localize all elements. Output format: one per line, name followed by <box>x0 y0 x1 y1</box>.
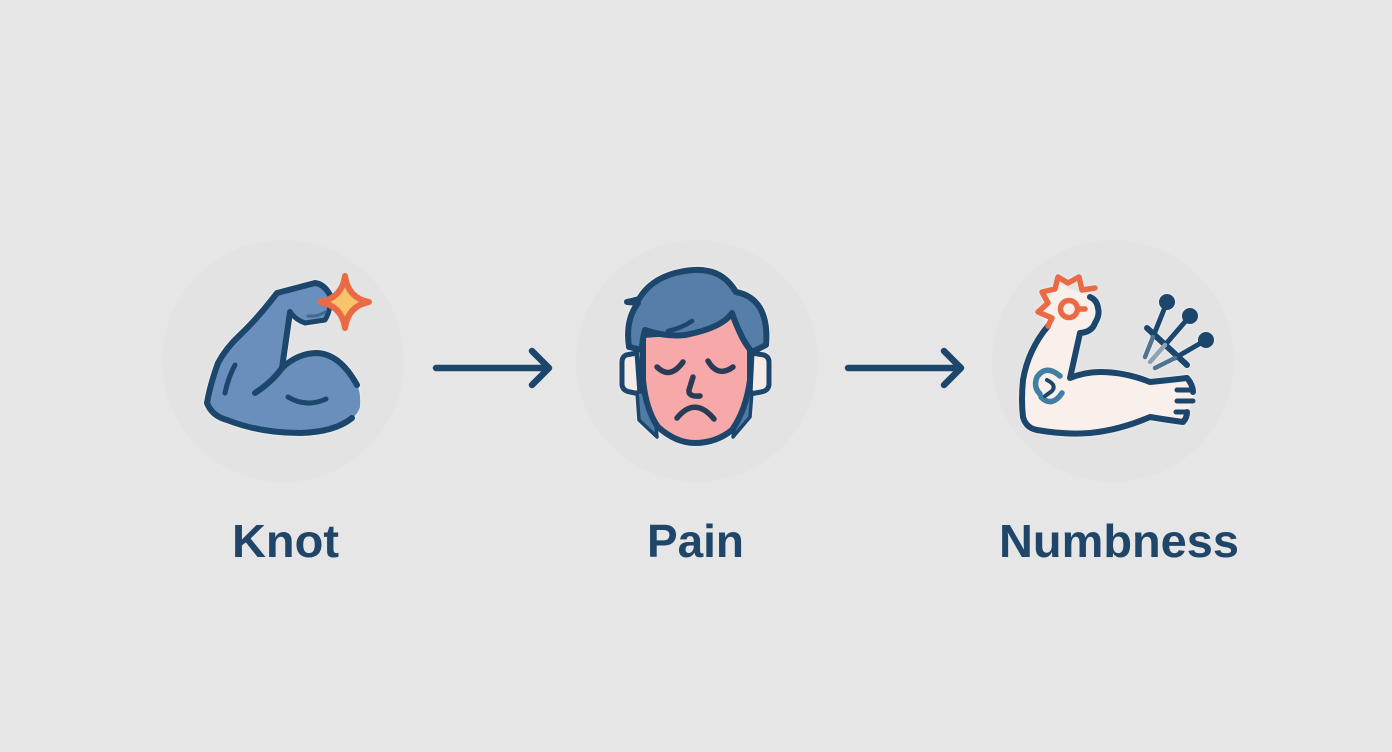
step 1: knot <box>162 240 404 567</box>
numb patch spiral <box>1036 370 1062 402</box>
eyes, nose and mouth <box>657 361 733 419</box>
label: Pain: Pain <box>647 515 744 567</box>
arrow: knot to pain <box>436 351 549 385</box>
label: Knot: Knot <box>232 515 339 567</box>
icon: pain spark <box>320 276 369 328</box>
icon backdrop circle: knot <box>162 240 404 482</box>
pain burst <box>1038 277 1095 326</box>
arm outline <box>1022 297 1193 434</box>
ears <box>622 353 769 394</box>
icon backdrop circle: pain <box>576 240 818 482</box>
icon: flexed arm <box>207 283 360 433</box>
label: Numbness: Numbness <box>999 515 1239 567</box>
lower hair <box>637 392 752 437</box>
icon: arm with tingling <box>1022 277 1214 434</box>
step 2: pain <box>576 240 818 567</box>
arrow: pain to numbness <box>848 351 961 385</box>
step 3: numbness <box>992 240 1239 567</box>
inflamed joint ring <box>1060 300 1085 318</box>
icon backdrop circle: numbness <box>992 240 1234 482</box>
face shape <box>643 313 750 443</box>
needles <box>1147 302 1206 365</box>
icon: pained face <box>622 270 769 443</box>
hair <box>627 270 766 352</box>
